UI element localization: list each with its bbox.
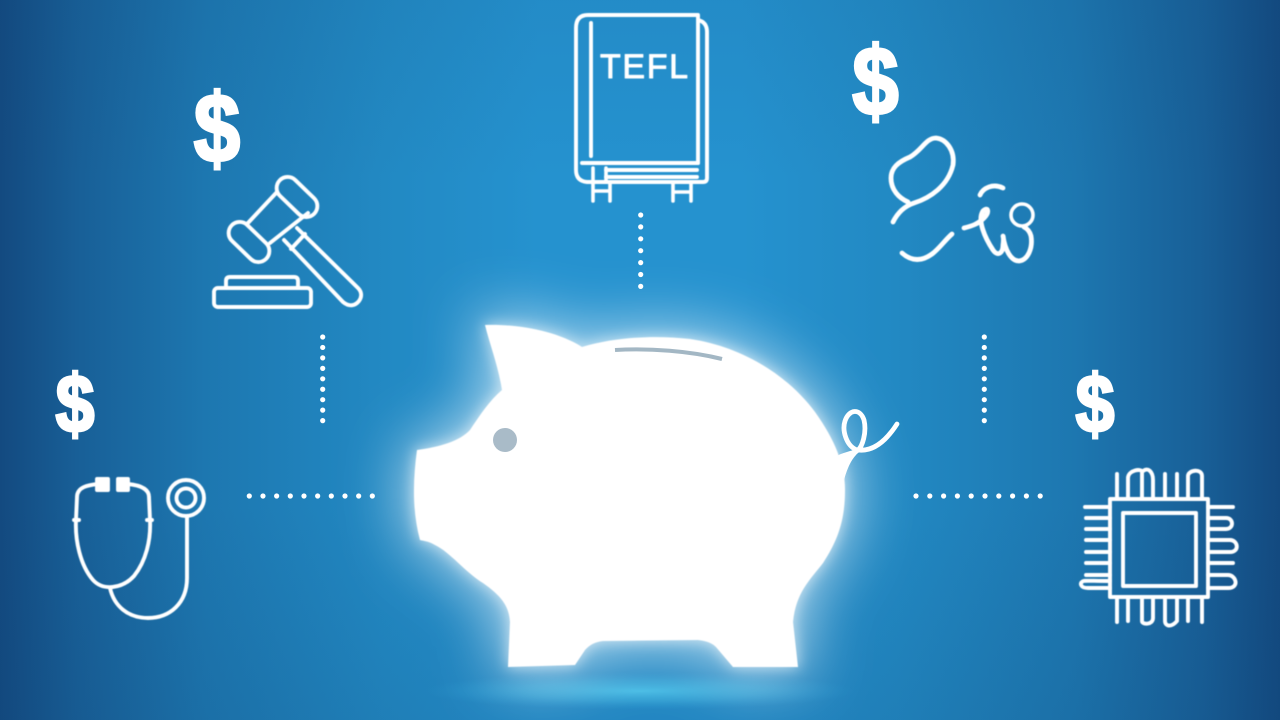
icon: microchip bbox=[1081, 470, 1237, 626]
connector: gavel to pig bbox=[320, 337, 325, 421]
piggy bank bbox=[414, 325, 897, 667]
dollar sign: medicine: $ bbox=[56, 359, 94, 450]
dollar sign: language: $ bbox=[852, 28, 899, 136]
pig eye bbox=[493, 428, 517, 452]
dollar sign: technology: $ bbox=[1076, 359, 1114, 450]
icon: TEFL book bbox=[576, 15, 707, 201]
dollar sign: law: $ bbox=[194, 75, 240, 183]
connector: book to pig bbox=[638, 215, 643, 287]
coin slot bbox=[615, 349, 722, 359]
pig body bbox=[414, 325, 845, 667]
icon: stethoscope bbox=[74, 479, 204, 618]
icon: language script bbox=[891, 138, 1033, 261]
book title: TEFL bbox=[600, 48, 688, 86]
pig tail bbox=[838, 411, 897, 480]
connector: script to pig bbox=[982, 337, 987, 421]
icon: gavel bbox=[214, 172, 361, 307]
connector: stethoscope to pig bbox=[249, 493, 372, 499]
connector: chip to pig bbox=[916, 493, 1040, 499]
floor glow bbox=[425, 672, 855, 710]
